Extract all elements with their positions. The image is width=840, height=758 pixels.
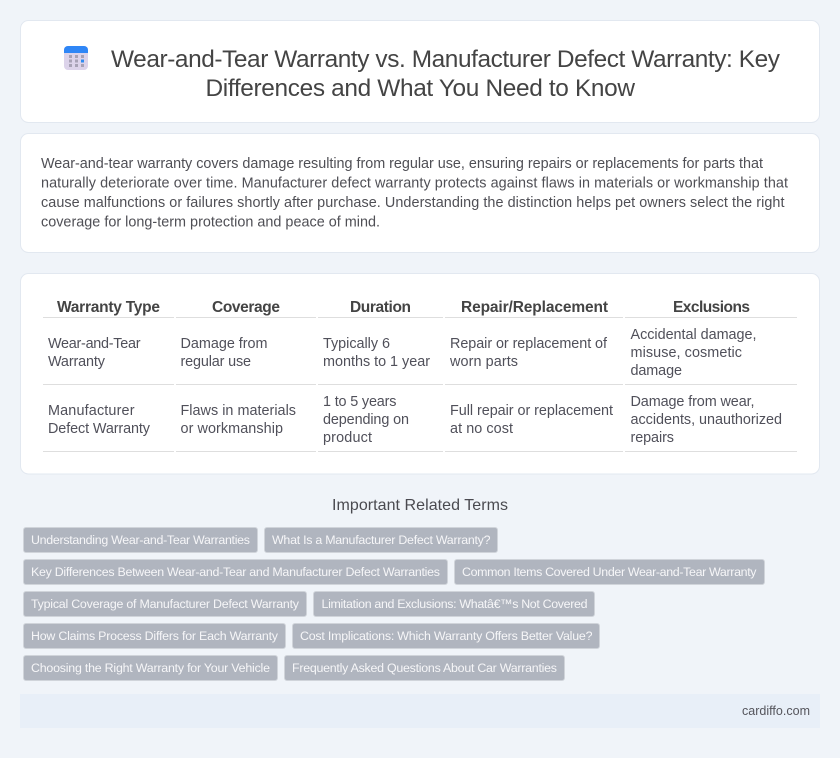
tag: choosing the right warranty: Choosing the Right Warranty for Your Vehicle [31,661,270,675]
table header row: Warranty Type [57,299,160,316]
tag: common items [454,560,764,584]
tag: claims process [24,624,286,648]
table row: wear-and-tear warranty: Damage from [180,336,268,352]
panel: important related terms [24,497,764,680]
table row: wear-and-tear warranty: worn parts [449,354,518,370]
table row: manufacturer defect warranty: at no cost [450,421,513,437]
table row: wear-and-tear warranty: Typically 6 [323,336,390,352]
tag: frequently asked questions: Frequently Asked Questions About Car Warranties [292,661,557,675]
tag: limitation and exclusions: Limitation and Exclusions: Whatâ€™s Not Covered [322,597,588,611]
text block: introduction paragraph: cause malfunctions or failures shortly after purchase. Understanding the distinction helps pet owners select the right [41,195,784,211]
tag: typical coverage: Typical Coverage of Manufacturer Defect Warranty [31,597,300,611]
panel: header [20,20,820,122]
panel: comparison table [20,274,820,474]
text block: introduction paragraph: Wear-and-tear warranty covers damage resulting from regular use, ensuring repairs or replacements for parts that [41,156,763,172]
footer [20,694,820,728]
tag: typical coverage [24,592,306,616]
panel: introduction [20,134,820,252]
tag: manufacturer defect warranty [264,528,498,552]
table row: manufacturer defect warranty: product [323,430,372,446]
table header row: Coverage [212,299,280,316]
table row: manufacturer defect warranty: Manufacturer [48,403,135,419]
table row: manufacturer defect warranty: Defect Warranty [48,421,151,437]
tag: limitation and exclusions [314,592,594,616]
tag: common items: Common Items Covered Under Wear-and-Tear Warranty [462,565,757,579]
table row: manufacturer defect warranty: Full repair or replacement [450,403,613,419]
table header row [43,299,797,318]
tag: cost implications [292,624,600,648]
title [111,46,781,102]
table row: wear-and-tear warranty: Wear-and-Tear [48,336,141,352]
table header row: Repair/Replacement [461,299,608,316]
icon: calendar [64,46,88,70]
tag: frequently asked questions [284,656,564,680]
table header row: Exclusions [673,299,750,316]
table row: manufacturer defect warranty: Damage from wear, [630,394,754,410]
text block: introduction paragraph: coverage for long-term protection and peace of mind. [41,214,380,230]
tag: manufacturer defect warranty: What Is a Manufacturer Defect Warranty? [272,533,491,547]
tag: understanding warranties [24,528,258,552]
table row: manufacturer defect warranty: accidents, unauthorized [630,412,782,428]
tag: understanding warranties: Understanding Wear-and-Tear Warranties [31,533,250,547]
table header row: Duration [350,299,411,316]
tag: cost implications: Cost Implications: Which Warranty Offers Better Value? [300,629,593,643]
title: Wear-and-Tear Warranty vs. Manufacturer Defect Warranty: Key [111,46,781,73]
table row: wear-and-tear warranty: months to 1 year [323,354,430,370]
text block: introduction paragraph [41,156,788,230]
table row: manufacturer defect warranty: repairs [630,430,674,446]
table row: manufacturer defect warranty: or workmanship [180,421,283,437]
table row: manufacturer defect warranty [43,394,797,452]
table row: wear-and-tear warranty: Repair or replacement of [450,336,608,352]
tag: key differences: Key Differences Between Wear-and-Tear and Manufacturer Defect Warranties [31,565,440,579]
table row: manufacturer defect warranty: depending on [323,412,409,428]
table row: manufacturer defect warranty: 1 to 5 years [323,394,396,410]
table row: manufacturer defect warranty: Flaws in materials [180,403,296,419]
table row: wear-and-tear warranty [43,327,797,385]
table row: wear-and-tear warranty: regular use [180,354,251,370]
title: Differences and What You Need to Know [206,75,635,102]
table row: wear-and-tear warranty: damage [630,363,682,379]
tag: claims process: How Claims Process Differs for Each Warranty [31,629,279,643]
heading: related terms: Important Related Terms [332,497,508,514]
table row: wear-and-tear warranty: Accidental damage, [630,327,756,343]
footer: cardiffo.com [742,704,810,718]
text block: introduction paragraph: naturally deteriorate over time. Manufacturer defect warranty protects against flaws in materials or workmanship that [41,176,788,192]
tag: choosing the right warranty [24,656,278,680]
table row: wear-and-tear warranty: misuse, cosmetic [630,345,742,361]
table row: wear-and-tear warranty: Warranty [48,354,106,370]
tag: key differences [24,560,448,584]
